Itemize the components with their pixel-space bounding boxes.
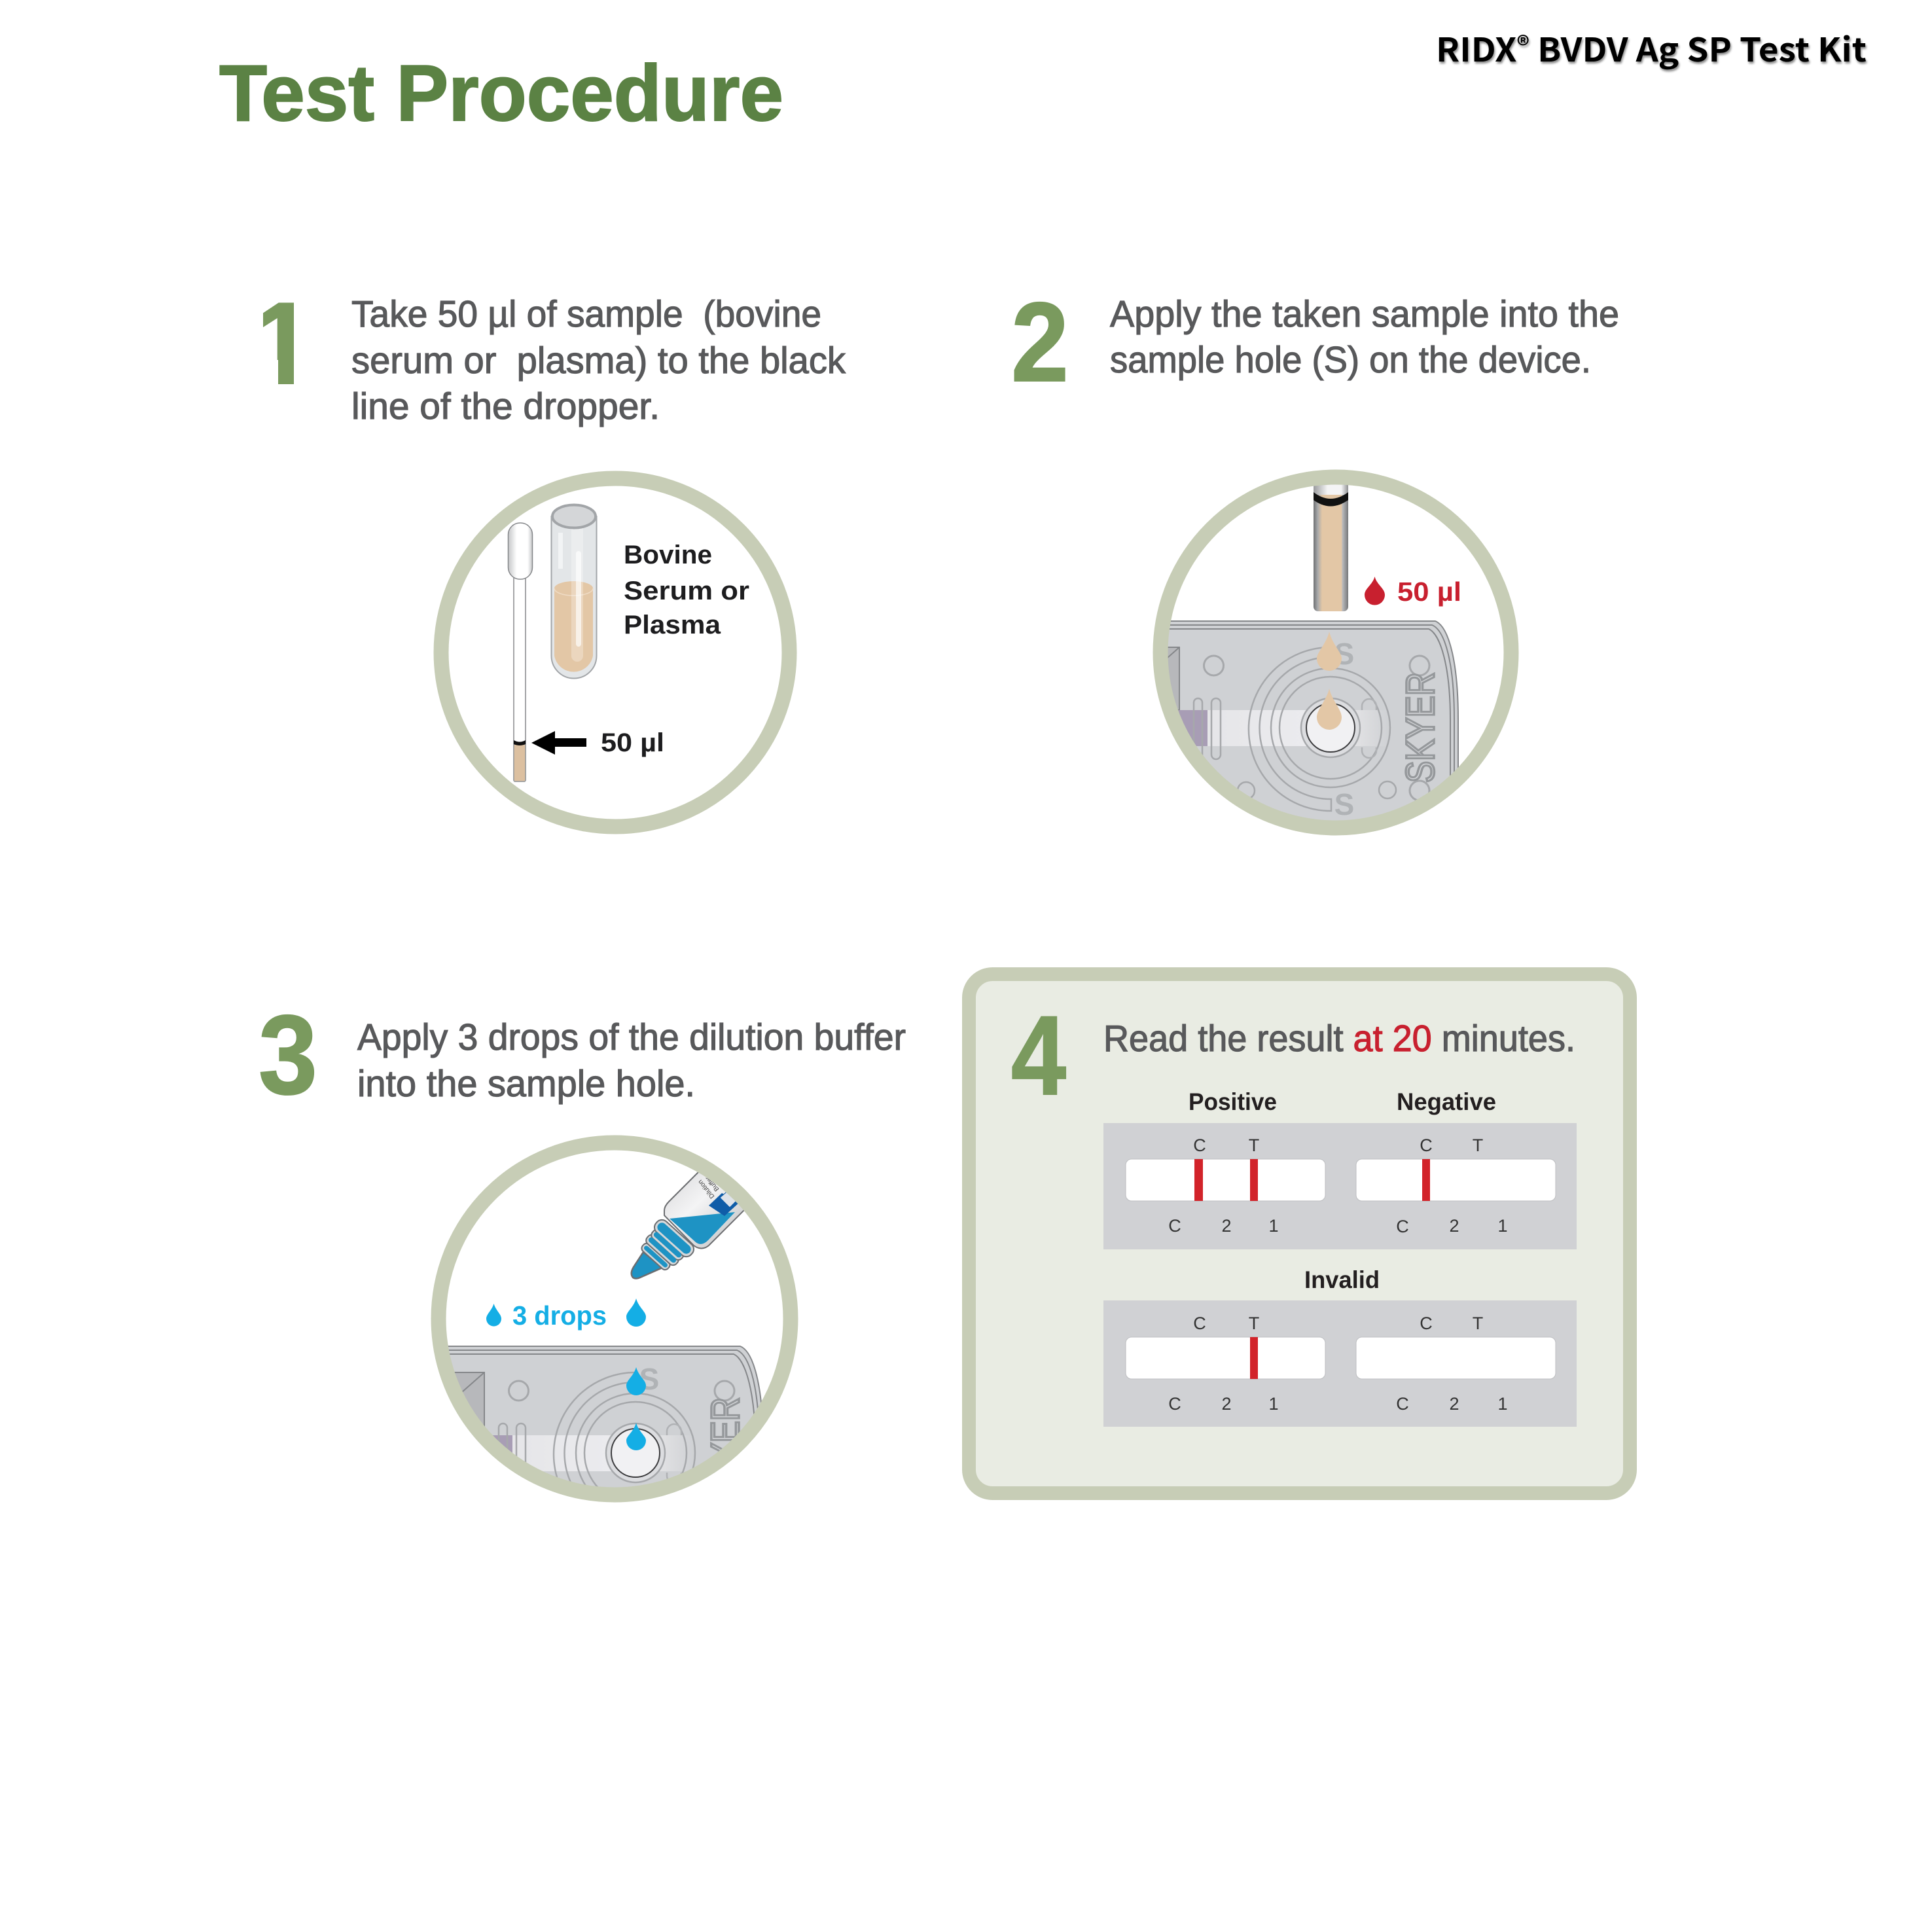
- invalid strip: test line only: [1126, 1314, 1325, 1414]
- drops label: 3 drops: [512, 1300, 607, 1331]
- step 2 instructions: [1110, 293, 1619, 381]
- icon: dropper: [508, 523, 533, 781]
- step 1 instructions: [351, 293, 846, 427]
- invalid strip: no lines: [1356, 1314, 1556, 1414]
- step 4 instruction: Read the result at 20 minutes.: [1103, 1018, 1575, 1060]
- step 3: [260, 1014, 906, 1503]
- invalid strip: no lines: T: [1473, 1314, 1483, 1333]
- product name header: BVDV Ag SP Test Kit: [1530, 24, 1867, 71]
- product name header: ®: [1516, 27, 1530, 61]
- negative strip: [1356, 1136, 1556, 1236]
- result strips: positive and negative: [1103, 1123, 1577, 1249]
- specimen label: Plasma: [624, 611, 721, 639]
- invalid strip: test line only: C: [1193, 1314, 1206, 1333]
- step 3 illustration circle: [431, 1135, 798, 1503]
- product name header: RIDX: [1436, 24, 1512, 71]
- step 1 instructions: Take 50 µl of sample (bovine: [351, 293, 821, 335]
- drop on sample hole: [1317, 689, 1342, 730]
- device: S: [1334, 787, 1354, 821]
- step 3 instructions: [357, 1016, 906, 1105]
- drop falling: [1317, 632, 1342, 671]
- drop on sample hole: [626, 1423, 646, 1450]
- invalid strip: no lines: C: [1420, 1314, 1433, 1333]
- positive strip: C: [1193, 1136, 1206, 1155]
- positive heading: Positive: [1189, 1088, 1277, 1115]
- device: SKYER: [1398, 672, 1442, 783]
- device: S: [639, 1362, 659, 1396]
- invalid strip: no lines: 1: [1497, 1394, 1508, 1414]
- invalid heading: Invalid: [1304, 1266, 1380, 1293]
- volume label: 50 µl: [601, 728, 664, 757]
- icon: blue drop: [626, 1298, 646, 1327]
- step 2 number: 2: [1011, 279, 1069, 405]
- icon: buffer bottle: Dilution: [697, 1178, 716, 1200]
- step 2 illustration circle: [1153, 470, 1518, 835]
- panel: step 4 results: [969, 974, 1630, 1494]
- invalid strip: no lines: C: [1396, 1394, 1409, 1414]
- icon: red drop: [1365, 577, 1385, 605]
- pipette tip: [1314, 480, 1348, 611]
- invalid strip: test line only: 1: [1268, 1394, 1279, 1414]
- device: S: [1334, 637, 1354, 671]
- device: [448, 1346, 762, 1487]
- positive strip: C: [1168, 1216, 1181, 1236]
- icon: test tube: [551, 505, 597, 678]
- negative strip: C: [1420, 1136, 1433, 1155]
- invalid strip: test line only: T: [1249, 1314, 1259, 1333]
- invalid strip: test line only: 2: [1221, 1394, 1232, 1414]
- result strips: invalid: [1103, 1300, 1577, 1427]
- step 3 instructions: Apply 3 drops of the dilution buffer: [357, 1016, 906, 1058]
- positive strip: T: [1249, 1136, 1259, 1155]
- specimen label: Bovine: [624, 541, 712, 569]
- negative strip: 2: [1449, 1216, 1459, 1236]
- icon: buffer bottle: Buffer: [704, 1174, 721, 1192]
- title: Test Procedure: [219, 48, 783, 137]
- device: [1168, 620, 1459, 821]
- positive strip: 2: [1221, 1216, 1232, 1236]
- positive strip: 1: [1268, 1216, 1279, 1236]
- step 1 instructions: serum or plasma) to the black: [351, 340, 846, 382]
- specimen label: Serum or: [624, 577, 749, 605]
- icon: small blue drop: [486, 1304, 501, 1326]
- step 1: [251, 278, 846, 827]
- invalid strip: no lines: 2: [1449, 1394, 1459, 1414]
- specimen label: [624, 541, 749, 639]
- step 1 number: 1: [251, 278, 315, 408]
- step 1 instructions: line of the dropper.: [351, 385, 660, 427]
- volume label: 50 µl: [1397, 577, 1461, 607]
- drop falling: [626, 1367, 646, 1395]
- arrow to black line: [531, 731, 586, 755]
- invalid strip: test line only: C: [1168, 1394, 1181, 1414]
- step 3 instructions: into the sample hole.: [357, 1063, 695, 1105]
- positive strip: [1126, 1136, 1325, 1236]
- step 1 illustration circle: [441, 478, 789, 827]
- step 2 instructions: sample hole (S) on the device.: [1110, 339, 1591, 381]
- step 3 number: 3: [259, 992, 317, 1118]
- negative strip: T: [1473, 1136, 1483, 1155]
- negative strip: C: [1396, 1217, 1409, 1236]
- negative heading: Negative: [1397, 1088, 1496, 1115]
- step 4 number: 4: [1011, 993, 1066, 1118]
- step 2: [1011, 279, 1619, 850]
- icon: buffer bottle: [631, 1172, 744, 1279]
- device: SKYER: [703, 1397, 747, 1508]
- negative strip: 1: [1497, 1216, 1508, 1236]
- step 2 instructions: Apply the taken sample into the: [1110, 293, 1619, 335]
